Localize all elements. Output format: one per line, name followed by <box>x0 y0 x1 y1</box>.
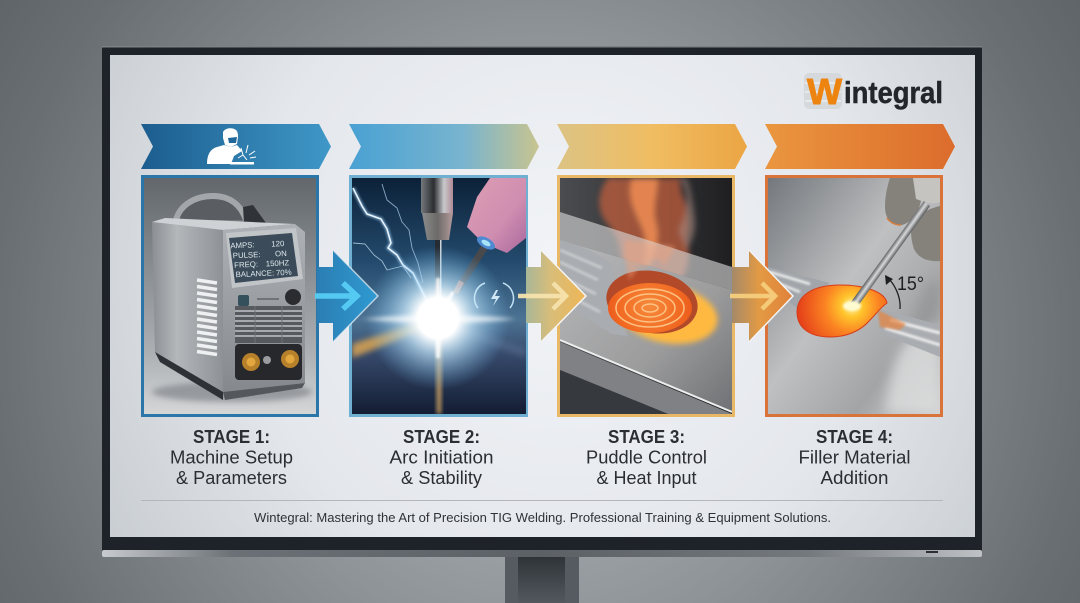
weld bead <box>560 240 628 336</box>
arrow 3 <box>730 250 793 342</box>
stage 3 image frame <box>557 175 735 417</box>
panel: stage 2 arc initiation <box>349 124 539 417</box>
caption: stage 4 <box>798 427 910 488</box>
caption: stage 1: Machine Setup <box>170 448 293 468</box>
footer text: Wintegral: Mastering the Art of Precision TIG Welding. Professional Training & Equipment Solutions. <box>254 510 831 525</box>
arrow 2 <box>518 250 586 342</box>
lightning bolts <box>352 184 426 299</box>
panel: stage 3 puddle control <box>557 124 747 417</box>
left weld bead <box>768 267 830 309</box>
plate surface <box>560 240 732 412</box>
pink ceramic nozzle <box>452 178 526 295</box>
stage 2 image frame <box>349 175 528 417</box>
monitor stand <box>505 557 579 603</box>
logo: Wintegral: W <box>807 71 842 112</box>
lcd display: 70% <box>276 268 292 277</box>
lcd display: BALANCE: <box>235 268 274 279</box>
caption: stage 2 <box>390 427 494 488</box>
molten pool <box>797 285 887 337</box>
icon: welder <box>207 128 256 164</box>
flames behind plate <box>599 178 695 286</box>
caption: stage 2: & Stability <box>401 468 482 488</box>
welding machine illustration <box>152 196 312 402</box>
panel: stage 1 machine setup <box>141 124 331 417</box>
caption: stage 4: Addition <box>820 468 888 488</box>
arc illustration <box>352 178 526 414</box>
lcd display: FREQ: <box>234 260 258 270</box>
angle annotation <box>885 274 924 309</box>
caption: stage 2: Arc Initiation <box>390 448 494 468</box>
lcd display: 120 <box>271 239 285 249</box>
flames over puddle <box>624 240 675 280</box>
caption: stage 2: STAGE 2: <box>403 427 480 447</box>
caption: stage 3: & Heat Input <box>596 468 696 488</box>
gloved hand <box>885 178 940 261</box>
stage 1 chevron banner <box>141 124 331 169</box>
screen <box>110 55 975 537</box>
caption: stage 1: & Parameters <box>176 468 287 488</box>
stage 3 chevron banner <box>557 124 747 169</box>
controls and grille <box>235 289 302 343</box>
right weld bead <box>904 316 940 357</box>
stage 2 chevron banner <box>349 124 539 169</box>
angle annotation: 15° <box>897 274 924 295</box>
filler rod illustration <box>768 178 940 414</box>
logo: Wintegral: integral <box>844 75 943 110</box>
caption: stage 3 <box>586 427 707 488</box>
caption: stage 4: STAGE 4: <box>816 427 893 447</box>
molten puddle <box>624 286 721 348</box>
stage 4 image frame <box>765 175 943 417</box>
lcd display: PULSE: <box>233 250 261 260</box>
caption: stage 1 <box>170 427 293 488</box>
output sockets <box>235 344 302 380</box>
plate front edge <box>560 340 732 414</box>
filler rod <box>851 201 930 306</box>
arrow 1 <box>315 250 378 342</box>
arc flash <box>362 246 516 390</box>
lcd display: 150HZ <box>266 258 290 268</box>
caption: stage 1: STAGE 1: <box>193 427 270 447</box>
divider line <box>141 500 943 501</box>
caption: stage 4: Filler Material <box>798 448 910 468</box>
panel: stage 4 filler addition <box>765 124 955 417</box>
side vents <box>197 280 217 354</box>
caption: stage 3: Puddle Control <box>586 448 707 468</box>
tungsten electrode <box>421 178 453 294</box>
stage 1 image frame <box>141 175 319 417</box>
caption: stage 3: STAGE 3: <box>608 427 685 447</box>
lcd display <box>226 228 303 288</box>
weld puddle illustration <box>560 178 732 414</box>
icon: energy ring <box>475 283 513 308</box>
logo: Wintegral <box>804 71 943 112</box>
stage 4 chevron banner <box>765 124 955 169</box>
lcd display: AMPS: <box>230 240 255 250</box>
monitor frame <box>102 46 982 557</box>
lcd display: ON <box>275 249 287 258</box>
